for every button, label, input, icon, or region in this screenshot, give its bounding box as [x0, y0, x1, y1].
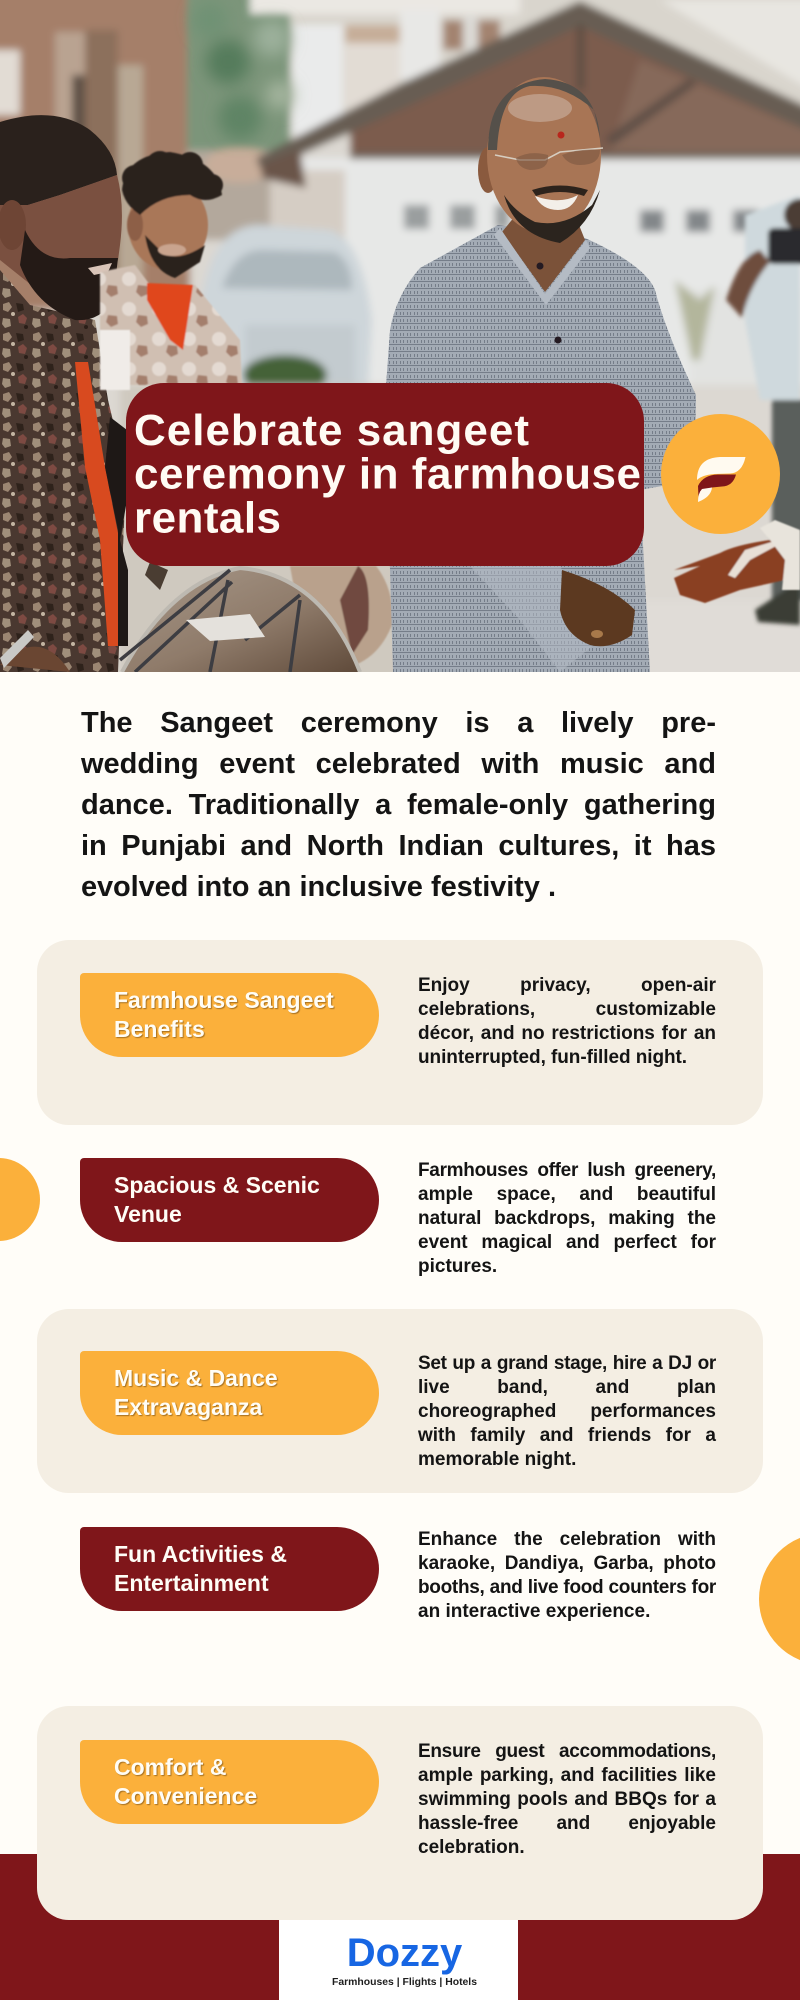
pill heading: Spacious & Scenic Venue: Venue	[114, 1200, 182, 1226]
text: music description: live band, and plan	[418, 1376, 716, 1398]
title banner: ceremony in farmhouse	[134, 450, 641, 498]
pill heading: Music & Dance Extravaganza: Extravaganza	[114, 1394, 262, 1420]
panel: Music & Dance card	[37, 1309, 763, 1493]
text: music description: Set up a grand stage, hire a DJ or	[418, 1352, 716, 1374]
logo wordmark: Dozzy	[347, 1931, 462, 1975]
pill heading: Farmhouse Sangeet Benefits: Farmhouse Sangeet	[114, 987, 334, 1013]
intro paragraph	[80, 707, 716, 903]
text: benefits description	[418, 974, 716, 1068]
intro paragraph: evolved into an inclusive festivity .	[81, 871, 556, 903]
pill heading: Fun Activities & Entertainment: Entertainment	[114, 1570, 269, 1596]
intro paragraph: The Sangeet ceremony is a lively pre-	[81, 707, 716, 739]
text: comfort description: hassle-free and enjoyable	[418, 1812, 716, 1834]
icon: round orange F logo	[661, 414, 780, 534]
logo tagline: Farmhouses | Flights | Hotels	[332, 1977, 477, 1988]
text: activities description: Enhance the celebration with	[418, 1528, 716, 1550]
text: activities description: an interactive experience.	[418, 1600, 650, 1622]
pill heading: Farmhouse Sangeet Benefits: Benefits	[114, 1016, 205, 1042]
text: comfort description: Ensure guest accommodations,	[418, 1740, 716, 1762]
man with long hair and beard in patterned jacket	[0, 115, 128, 672]
cameraman in the background	[726, 195, 800, 625]
title banner: rentals	[134, 494, 281, 542]
footer maroon band	[0, 1854, 800, 2000]
pill heading: Music & Dance Extravaganza: Music & Dance	[114, 1365, 278, 1391]
text: comfort description: celebration.	[418, 1836, 525, 1858]
decorative left orange half circle	[0, 1158, 40, 1241]
pill heading: Music & Dance Extravaganza	[80, 1351, 379, 1435]
hennaed hand with white cuff	[674, 520, 800, 603]
text: music description: with family and friends for a	[418, 1424, 716, 1446]
second dhol behind	[290, 566, 392, 665]
title banner: Celebrate sangeet	[134, 406, 529, 455]
text: venue description: natural backdrops, making the	[418, 1208, 716, 1229]
panel: Comfort & Convenience card	[37, 1706, 763, 1920]
text: activities description: booths, and live food counters for	[418, 1576, 716, 1598]
curly haired man with orange shirt and jacket	[100, 151, 242, 390]
text: venue description: pictures.	[418, 1256, 497, 1277]
intro paragraph: in Punjabi and North Indian cultures, it has	[81, 830, 716, 862]
text: music description	[418, 1352, 716, 1470]
hero photo: sangeet guests with dhol in front of a farmhouse	[0, 0, 800, 672]
text: venue description: event magical and perfect for	[418, 1232, 716, 1253]
footer logo: Dozzy	[279, 1920, 518, 2000]
text: venue description: ample space, and beautiful	[418, 1184, 716, 1205]
title banner	[126, 383, 644, 566]
text: activities description: karaoke, Dandiya, Garba, photo	[418, 1552, 716, 1574]
decorative right orange half circle	[759, 1533, 800, 1665]
pill heading: Comfort & Convenience: Comfort &	[114, 1754, 226, 1780]
text: music description: memorable night.	[418, 1448, 576, 1470]
panel: Farmhouse Sangeet Benefits card	[37, 940, 763, 1125]
dhol drum with ropes	[120, 562, 360, 672]
pill heading: Comfort & Convenience	[80, 1740, 379, 1824]
text: comfort description: ample parking, and facilities like	[418, 1764, 716, 1786]
smiling man in grey kurta	[385, 77, 696, 672]
text: activities description	[418, 1528, 716, 1622]
text: benefits description: uninterrupted, fun-filled night.	[418, 1046, 687, 1068]
foliage blobs	[192, 2, 294, 140]
pill heading: Spacious & Scenic Venue	[80, 1158, 379, 1242]
text: venue description: Farmhouses offer lush greenery,	[418, 1160, 716, 1181]
text: venue description	[418, 1160, 716, 1277]
text: benefits description: Enjoy privacy, open-air	[418, 974, 716, 996]
pill heading: Comfort & Convenience: Convenience	[114, 1782, 257, 1808]
pill heading: Farmhouse Sangeet Benefits	[80, 973, 379, 1057]
text: comfort description	[418, 1740, 716, 1858]
pill heading: Fun Activities & Entertainment: Fun Activities &	[114, 1541, 287, 1567]
blurred background: buildings, foliage, car	[0, 0, 800, 690]
text: comfort description: swimming pools and BBQs for a	[418, 1788, 716, 1810]
pill heading: Fun Activities & Entertainment	[80, 1527, 379, 1611]
text: benefits description: décor, and no restrictions for an	[418, 1022, 716, 1044]
intro paragraph: dance. Traditionally a female-only gathering	[81, 789, 716, 821]
text: music description: choreographed performances	[418, 1400, 716, 1422]
pill heading: Spacious & Scenic Venue: Spacious & Scenic	[114, 1172, 320, 1198]
intro paragraph: wedding event celebrated with music and	[81, 748, 716, 780]
text: benefits description: celebrations, customizable	[418, 998, 716, 1020]
